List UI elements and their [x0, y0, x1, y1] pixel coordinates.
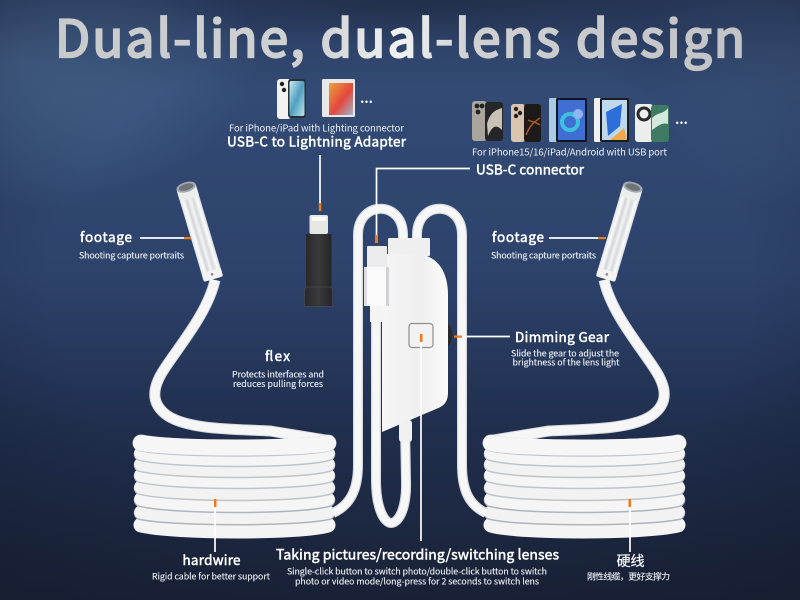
- callout: left footage leader: [140, 237, 191, 239]
- label: 硬线: 硬线: [616, 551, 644, 571]
- label: flex: flex: [265, 345, 290, 365]
- right camera head: [596, 179, 644, 282]
- callout: right hardwire leader: [628, 499, 631, 552]
- text: left footage description: Shooting capture portraits: [79, 248, 184, 262]
- left flex cable: [155, 280, 332, 441]
- icon: Android phone: [635, 104, 669, 142]
- text: 硬线 description: 刚性线缆，更好支撑力: [587, 570, 670, 582]
- button: [409, 324, 433, 348]
- ellipsis: ...: [675, 109, 688, 128]
- label: left footage: footage: [80, 226, 132, 246]
- text: button description: photo or video mode/long-press for 2 seconds to switch lens: [295, 574, 539, 588]
- text: hardwire description: Rigid cable for better support: [152, 570, 271, 582]
- label: right footage: footage: [492, 226, 544, 246]
- panel: Lightning devices: [277, 79, 373, 119]
- left coil: [141, 443, 328, 531]
- label: hardwire: hardwire: [182, 549, 240, 569]
- control box: [382, 238, 452, 432]
- callout: USB-C leader: [375, 168, 470, 243]
- icon: iPhone: [277, 79, 306, 119]
- text: button description: [287, 564, 547, 588]
- lower U cable: [376, 320, 412, 523]
- icon: iPhone Pro: [472, 101, 503, 141]
- USB-C plug: [364, 246, 389, 322]
- panel: USB-C devices: [472, 98, 688, 142]
- icon: Android tablet: [594, 98, 629, 142]
- label: USB-C connector: USB-C connector: [476, 158, 585, 178]
- title: Dual-line, dual-lens design: [55, 0, 745, 72]
- text: right footage description: Shooting capture portraits: [491, 248, 596, 262]
- label: USB port compatibility: For iPhone15/16/iPad/Android with USB port: [472, 144, 667, 158]
- icon: iPad: [322, 79, 355, 117]
- Lightning adapter: [304, 215, 332, 306]
- text: button description: Single-click button to switch photo/double-click button to switch: [287, 564, 547, 578]
- text: flex description: [232, 368, 324, 390]
- text: flex description: Protects interfaces and: [232, 368, 324, 380]
- right coil: [491, 443, 678, 531]
- label: Dimming Gear: Dimming Gear: [515, 326, 610, 346]
- text: flex description: reduces pulling forces: [233, 377, 323, 390]
- label: taking pictures: Taking pictures/recording/switching lenses: [276, 544, 559, 564]
- icon: iPhone 16: [511, 104, 541, 142]
- callout: adapter leader: [319, 155, 321, 211]
- callout: button leader: [420, 334, 422, 541]
- callout: left hardwire leader: [214, 499, 216, 552]
- cable loops above control box: [333, 209, 486, 513]
- right flex cable: [487, 280, 664, 441]
- label: Lightning compatibility: For iPhone/iPad with Lighting connector: [229, 120, 404, 134]
- left camera head: [175, 179, 223, 282]
- icon: iPad Air: [549, 98, 587, 142]
- text: dimming gear description: [511, 346, 620, 368]
- dimming gear: [447, 323, 452, 347]
- callout: dimming gear leader: [454, 336, 510, 338]
- ellipsis: ...: [360, 88, 373, 107]
- heading: USB-C to Lightning Adapter: USB-C to Lightning Adapter: [227, 130, 407, 150]
- callout: right footage leader: [549, 237, 606, 239]
- text: dimming gear description: brightness of the lens light: [512, 356, 620, 368]
- text: dimming gear description: Slide the gear to adjust the: [511, 346, 619, 360]
